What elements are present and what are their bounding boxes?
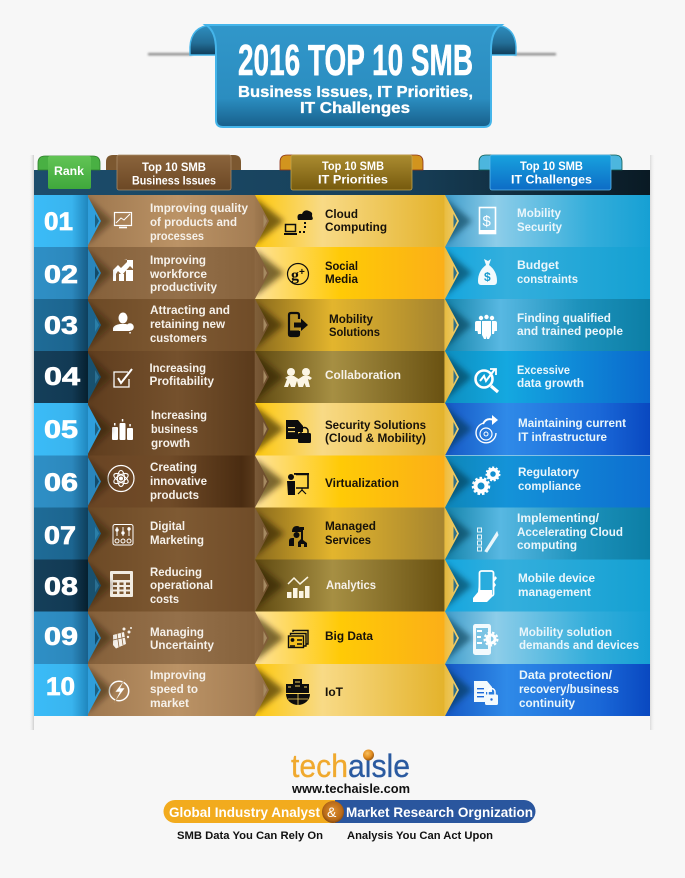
title heading: 2016 TOP 10 SMB bbox=[238, 36, 473, 85]
icon: document with lock bbox=[474, 681, 498, 705]
icon: cloud and computer bbox=[284, 210, 313, 235]
header tab: Business Issues bbox=[106, 155, 241, 190]
challenge 04: Excessive bbox=[517, 365, 570, 377]
shadows cast on challenges bbox=[445, 198, 472, 713]
challenge 07 bbox=[445, 508, 650, 560]
rank 05: 05 bbox=[44, 416, 78, 444]
icon: calculator bbox=[110, 571, 133, 597]
challenge 09: Mobility solution bbox=[519, 627, 612, 639]
icon: phone with dollar bbox=[479, 208, 496, 234]
subtitle bbox=[238, 84, 473, 117]
icon: folders bbox=[288, 630, 308, 648]
issue 01 bbox=[87, 195, 269, 247]
shadows cast on priorities bbox=[255, 198, 284, 713]
header tab: IT Priorities: Top 10 SMB bbox=[322, 161, 384, 173]
priority 02 bbox=[255, 247, 459, 299]
rank 10 bbox=[34, 664, 101, 716]
issue 02: workforce bbox=[149, 269, 207, 281]
challenge 07: computing bbox=[517, 540, 577, 552]
challenge 10 bbox=[445, 664, 650, 716]
rank 10: 10 bbox=[46, 673, 75, 701]
icon: podium bars bbox=[112, 419, 133, 440]
shadows cast on issues bbox=[87, 198, 113, 713]
issue 05: growth bbox=[151, 438, 190, 450]
issue 09: Uncertainty bbox=[150, 640, 215, 652]
icon: paper people bbox=[284, 368, 312, 387]
issue 02: productivity bbox=[150, 282, 218, 294]
header tab: IT Challenges: Top 10 SMB bbox=[520, 161, 583, 173]
issue 04: Profitability bbox=[150, 376, 215, 388]
icon: analytics chart bbox=[287, 577, 310, 598]
icon: checklist and pencil bbox=[478, 528, 498, 552]
challenge 01: Mobility bbox=[517, 208, 562, 220]
panel: IT Priorities column bbox=[255, 195, 472, 716]
issue 08: operational bbox=[150, 580, 213, 592]
challenge 09: demands and devices bbox=[519, 640, 639, 652]
priority 04: Collaboration bbox=[325, 370, 401, 382]
challenge 01 bbox=[445, 195, 650, 247]
rank 09: 09 bbox=[44, 623, 78, 651]
icon: magnifier with growth arrow bbox=[476, 369, 498, 392]
header tab: IT Challenges bbox=[479, 155, 622, 190]
rank 07: 07 bbox=[44, 522, 76, 550]
icon: growth chart bbox=[113, 260, 133, 281]
rank 02 bbox=[34, 247, 101, 299]
tagline pill bbox=[164, 800, 536, 823]
priority 08: Analytics bbox=[326, 580, 376, 592]
rank 02: 02 bbox=[44, 261, 78, 289]
icon: mixer panel bbox=[113, 524, 133, 545]
icon: presenter at board bbox=[287, 473, 309, 495]
slogans bbox=[177, 830, 493, 842]
challenge 09 bbox=[445, 612, 650, 664]
challenge 04 bbox=[445, 351, 650, 403]
logo wordmark: techaisle bbox=[291, 748, 410, 784]
issue 06: Creating bbox=[150, 462, 197, 474]
rank 06: 06 bbox=[44, 469, 78, 497]
priority 07: Managed bbox=[325, 521, 376, 533]
icon: cube with scattered dots bbox=[113, 627, 132, 648]
issue 10 bbox=[87, 664, 269, 716]
challenge 03: and trained people bbox=[517, 326, 623, 338]
challenge 02 bbox=[445, 247, 650, 299]
icon: Google Plus circle: g bbox=[291, 267, 299, 284]
header tab: IT Priorities: IT Priorities bbox=[318, 174, 388, 186]
challenge 05: IT infrastructure bbox=[518, 432, 607, 444]
issue 08: Reducing bbox=[150, 567, 202, 579]
rank 01: 01 bbox=[44, 208, 73, 236]
issue 03: customers bbox=[150, 333, 207, 345]
icon: atom in circle bbox=[108, 466, 134, 492]
rank 06 bbox=[34, 456, 101, 508]
issue 08: costs bbox=[150, 594, 179, 606]
challenge 07: Implementing/ bbox=[517, 513, 600, 525]
challenge 03 bbox=[445, 299, 650, 351]
priority 04 bbox=[255, 351, 459, 403]
issue 06: innovative bbox=[150, 476, 207, 488]
icon: lightning in circle bbox=[109, 679, 129, 703]
issue 10: Improving bbox=[150, 670, 206, 682]
priority 01 bbox=[255, 195, 459, 247]
issue 07: Marketing bbox=[150, 535, 204, 547]
issue 09 bbox=[87, 612, 269, 664]
icon: money bag bbox=[478, 259, 497, 285]
challenge 05 bbox=[445, 403, 650, 455]
header tab: Rank bbox=[38, 156, 100, 189]
challenge 06: Regulatory bbox=[518, 467, 580, 479]
icon: disc with arrow bbox=[476, 415, 498, 443]
issue 10: market bbox=[150, 698, 189, 710]
priority 05: Security Solutions bbox=[325, 420, 426, 432]
challenge 02: constraints bbox=[517, 274, 578, 286]
issue 04 bbox=[87, 351, 269, 403]
issue 02: Improving bbox=[150, 255, 206, 267]
header tab: Business Issues: Top 10 SMB bbox=[142, 162, 206, 174]
rank 05 bbox=[34, 403, 101, 456]
rank 08 bbox=[34, 560, 101, 612]
priority 01: Computing bbox=[325, 222, 387, 234]
challenge 08: management bbox=[518, 587, 591, 599]
challenge 08 bbox=[445, 560, 650, 612]
panel: Rank column bbox=[34, 195, 113, 716]
rank 07 bbox=[34, 508, 101, 560]
rank 01 bbox=[34, 195, 101, 247]
panel: Business Issues column bbox=[87, 195, 284, 716]
priority 07 bbox=[255, 508, 459, 560]
challenge 06: compliance bbox=[518, 481, 581, 493]
priority 07: Services bbox=[325, 535, 371, 547]
priority 02: Social bbox=[325, 261, 358, 273]
icon: buildings on globe bbox=[286, 679, 310, 705]
header tab: IT Challenges: IT Challenges bbox=[511, 174, 592, 186]
challenge 05: Maintaining current bbox=[518, 418, 626, 430]
issue 07 bbox=[87, 508, 269, 560]
challenge 06 bbox=[445, 456, 650, 508]
priority 08 bbox=[255, 560, 459, 612]
issue 02 bbox=[87, 247, 269, 299]
icon: Google Plus circle bbox=[288, 264, 308, 284]
slogans: Analysis You Can Act Upon bbox=[347, 830, 493, 842]
icon: group of people bbox=[475, 315, 497, 339]
rank 03: 03 bbox=[44, 312, 78, 340]
priority 02: Media bbox=[325, 274, 359, 286]
rank 08: 08 bbox=[44, 573, 78, 601]
website url: www.techaisle.com bbox=[291, 781, 410, 796]
rank 04: 04 bbox=[44, 363, 80, 391]
issue 05 bbox=[87, 403, 269, 456]
rank 09 bbox=[34, 612, 101, 664]
priority 09 bbox=[255, 612, 459, 664]
challenge 01: Security bbox=[517, 222, 563, 234]
icon: document with lock bbox=[286, 420, 311, 443]
challenge 10: Data protection/ bbox=[519, 670, 613, 682]
priority 01: Cloud bbox=[325, 209, 358, 221]
tagline pill: & bbox=[327, 804, 337, 820]
issue 03: retaining new bbox=[150, 319, 225, 331]
header tab: Business Issues: Business Issues bbox=[132, 176, 216, 188]
rank 04 bbox=[34, 351, 101, 403]
icon: checkbox with tick bbox=[114, 369, 132, 387]
table header band bbox=[34, 155, 650, 195]
tagline pill: Market Research Orgnization bbox=[346, 804, 533, 820]
icon: person with question mark bbox=[113, 312, 134, 334]
title banner bbox=[148, 25, 556, 127]
issue 07: Digital bbox=[150, 521, 185, 533]
issue 03 bbox=[87, 299, 269, 351]
challenge 04: data growth bbox=[517, 378, 584, 390]
icon: monitor with chart bbox=[114, 212, 132, 228]
issue 08 bbox=[87, 560, 269, 612]
icon: gears bbox=[473, 468, 500, 494]
issue 03: Attracting and bbox=[150, 305, 230, 317]
icon: phone with dollar: $ bbox=[482, 213, 492, 230]
icon: hand holding phone bbox=[473, 571, 497, 602]
subtitle: IT Challenges bbox=[300, 100, 410, 117]
icon: worker with wrench bbox=[289, 526, 307, 547]
issue 06: products bbox=[150, 490, 199, 502]
issue 05: business bbox=[151, 424, 198, 436]
icon: Google Plus circle: + bbox=[299, 267, 305, 278]
tagline pill: Global Industry Analyst bbox=[169, 804, 320, 820]
challenge 07: Accelerating Cloud bbox=[517, 527, 623, 539]
issue 01: Improving quality bbox=[150, 203, 249, 215]
priority 05 bbox=[255, 403, 459, 456]
issue 05: Increasing bbox=[151, 410, 207, 422]
issue 09: Managing bbox=[150, 627, 204, 639]
subtitle: Business Issues, IT Priorities, bbox=[238, 84, 473, 101]
priority 03: Mobility bbox=[329, 314, 374, 326]
challenge 08: Mobile device bbox=[518, 573, 595, 585]
slogans: SMB Data You Can Rely On bbox=[177, 830, 323, 842]
issue 06 bbox=[87, 456, 269, 508]
issue 01: of products and bbox=[150, 217, 237, 229]
priority 06: Virtualization bbox=[325, 478, 399, 490]
challenge 03: Finding qualified bbox=[517, 313, 611, 325]
issue 10: speed to bbox=[150, 684, 198, 696]
priority 05: (Cloud & Mobility) bbox=[325, 433, 426, 445]
footer: techaisle branding bbox=[164, 748, 536, 842]
icon: phone with arrow bbox=[289, 313, 308, 336]
rank 03 bbox=[34, 299, 101, 351]
priority 09: Big Data bbox=[325, 631, 374, 643]
challenge 02: Budget bbox=[517, 260, 559, 272]
challenge 10: recovery/business bbox=[519, 684, 619, 696]
icon: money bag: $ bbox=[484, 270, 491, 284]
header tab: Rank: Rank bbox=[54, 166, 85, 178]
panel: IT Challenges column bbox=[445, 195, 650, 716]
priority 06 bbox=[255, 456, 459, 508]
priority 10 bbox=[255, 664, 459, 716]
header tab: IT Priorities bbox=[280, 155, 423, 190]
priority 03: Solutions bbox=[329, 327, 380, 339]
priority 10: IoT bbox=[325, 687, 343, 699]
icon: phone with gear bbox=[473, 624, 498, 655]
issue 01: processes bbox=[150, 231, 204, 243]
issue 04: Increasing bbox=[150, 363, 206, 375]
challenge 10: continuity bbox=[519, 698, 576, 710]
priority 03 bbox=[255, 299, 459, 351]
